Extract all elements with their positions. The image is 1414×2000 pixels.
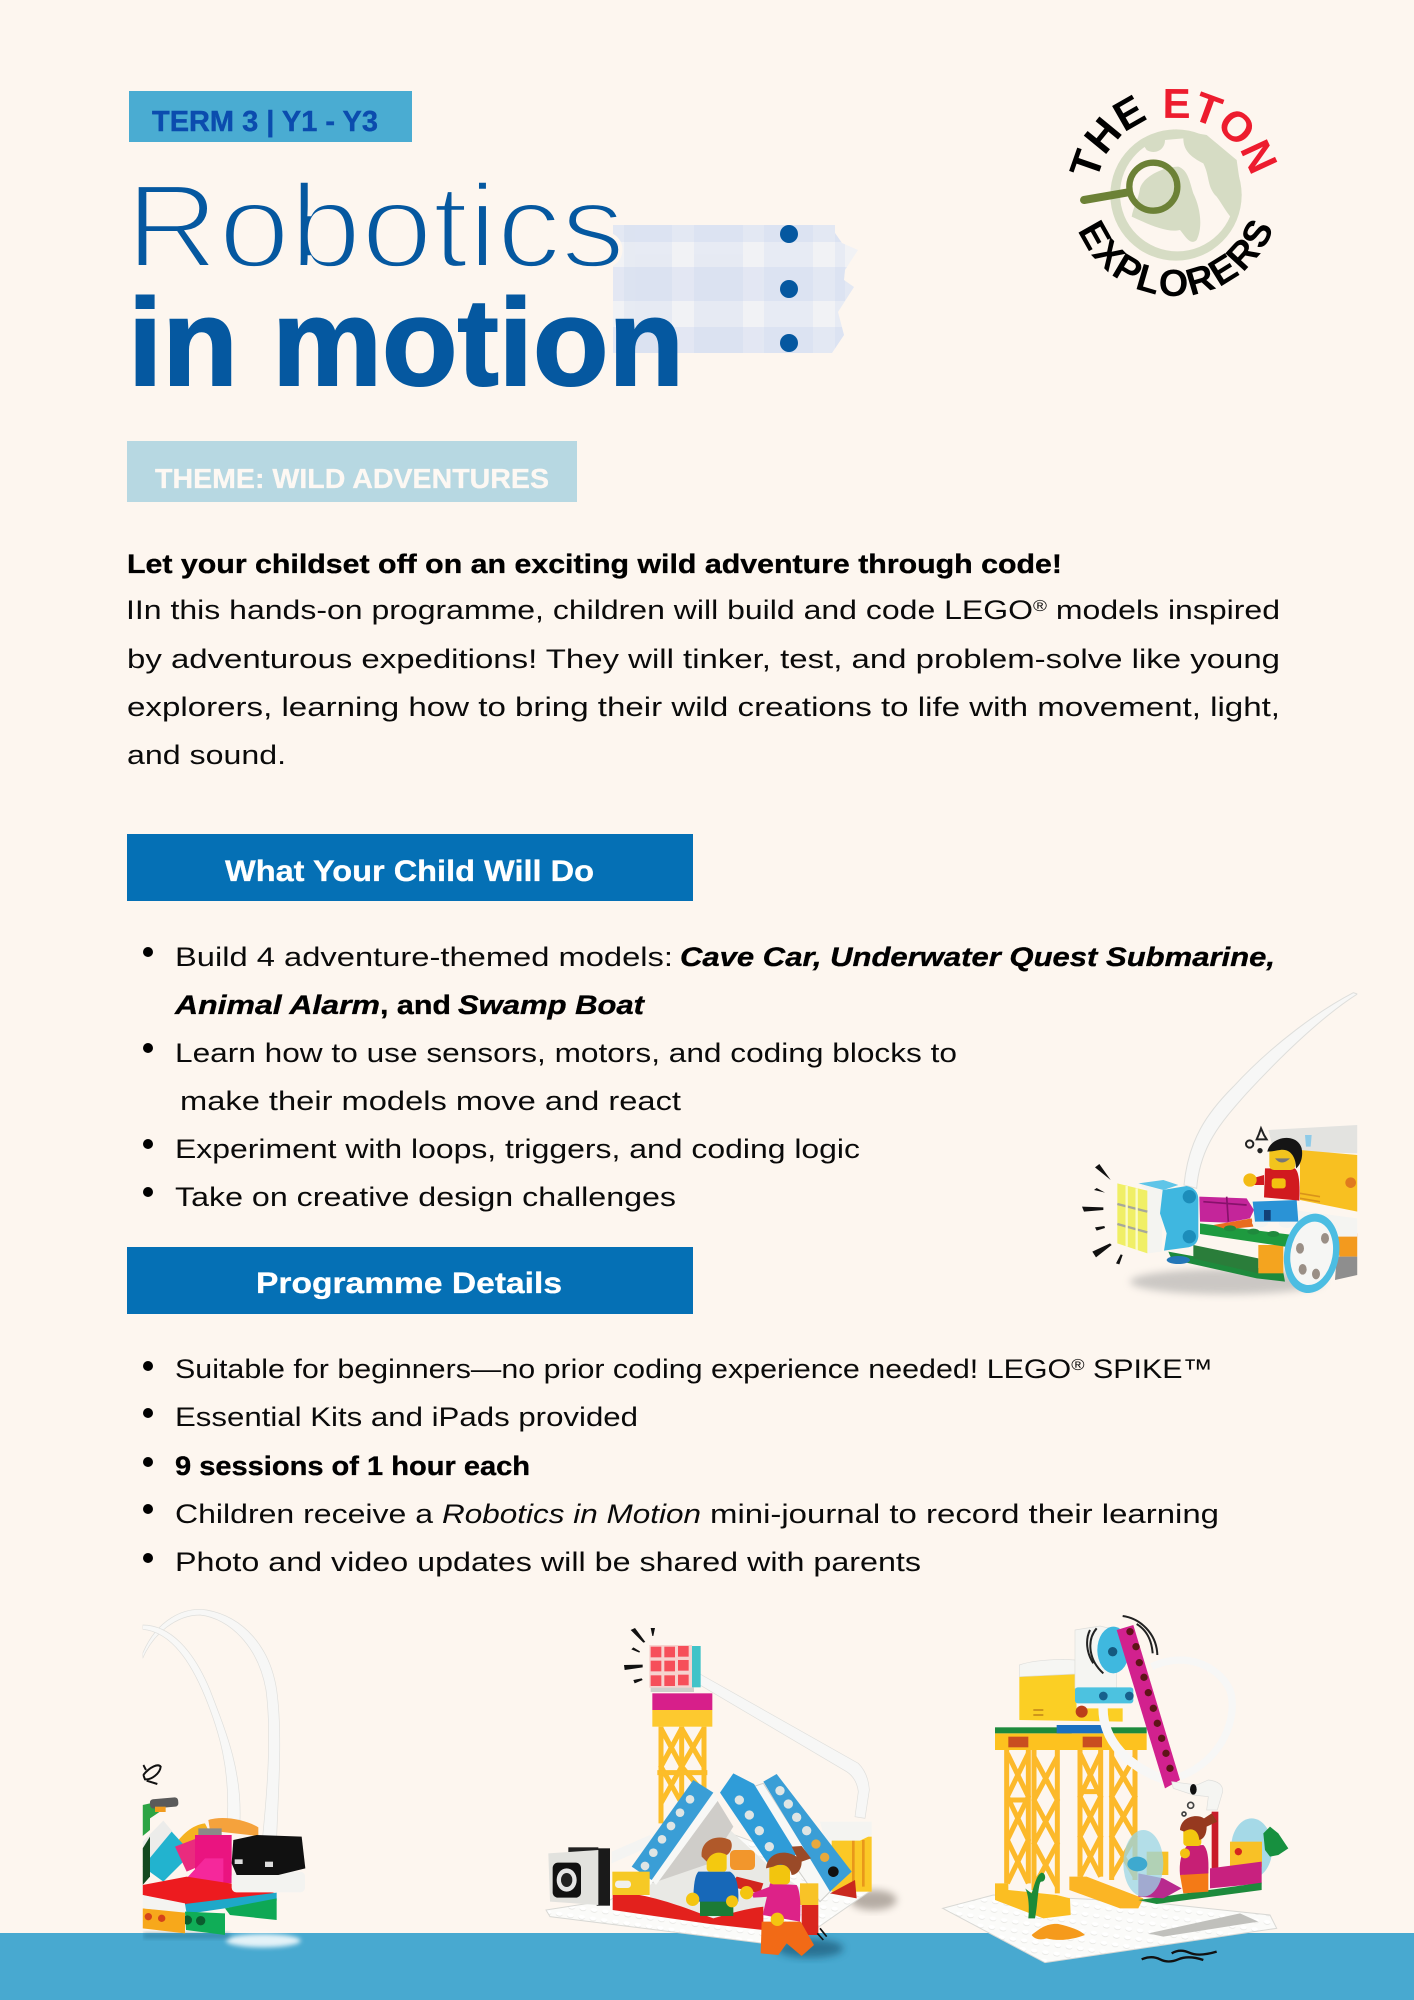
logo: The Eton Explorers [1069, 89, 1278, 296]
intro text block: and sound. [127, 740, 286, 770]
list: programme details: Robotics in Motion [442, 1499, 701, 1529]
list: programme details: Photo and video updates will be shared with parents [175, 1547, 921, 1577]
illustration: LEGO animal alarm (cropped at left) [143, 1610, 305, 1947]
list: programme details [143, 1354, 1219, 1577]
intro text block: Let your childset off on an exciting wild adventure through code! [127, 549, 1062, 579]
list: programme details: SPIKE™ [1085, 1354, 1213, 1384]
intro text block: IIn this hands-on programme, children will build and code LEGO [126, 595, 891, 625]
illustration: LEGO cave car [1082, 993, 1357, 1297]
term tag: TERM 3 | Y1 - Y3 [152, 106, 378, 138]
heading: What Your Child Will Do [127, 834, 693, 901]
intro text block: by adventurous expeditions! They will tinker, test, and problem-solve like young [127, 644, 1280, 674]
list: what your child will do: make their models move and react [180, 1086, 682, 1116]
intro text block: explorers, learning how to bring their wild creations to life with movement, light, [127, 692, 1280, 722]
list: programme details: Suitable for beginners—no prior coding experience needed! LEGO [175, 1354, 970, 1384]
intro text block: ® [1033, 598, 1047, 615]
list: what your child will do: Animal Alarm [174, 990, 380, 1020]
list: what your child will do: Learn how to use sensors, motors, and coding blocks to [175, 1038, 957, 1068]
list: programme details: Essential Kits and iPads provided [175, 1402, 638, 1432]
heading: Programme Details: Programme Details [256, 1267, 562, 1300]
list: what your child will do: Build 4 adventure-themed models: [175, 942, 673, 972]
list: what your child will do [143, 942, 1275, 1212]
illustration: LEGO submarine crane [943, 1616, 1288, 1963]
logo: The Eton Explorers: EXPLORERS [1078, 220, 1272, 296]
list: programme details: mini-journal to record their learning [710, 1499, 1219, 1529]
list: programme details: ® [1071, 1357, 1085, 1374]
title: Robotics [126, 160, 625, 293]
intro text block [126, 549, 1280, 770]
heading: What Your Child Will Do: What Your Child Will Do [225, 855, 594, 888]
term tag [129, 91, 412, 142]
intro text block: models inspired [1047, 595, 1280, 625]
title: in motion [128, 275, 684, 412]
decorative washi tape with dots [613, 225, 863, 353]
list: what your child will do: Cave Car, Underwater Quest Submarine, [680, 942, 1275, 972]
list: what your child will do: Experiment with loops, triggers, and coding logic [175, 1134, 860, 1164]
logo: The Eton Explorers: ETON [1165, 89, 1278, 174]
bottom blue band [0, 1933, 1414, 2000]
theme tag [127, 441, 577, 502]
logo: The Eton Explorers: THE [1069, 94, 1147, 172]
list: what your child will do: , and [380, 990, 451, 1020]
list: programme details: 9 sessions of 1 hour each [175, 1451, 530, 1481]
theme tag: THEME: WILD ADVENTURES [155, 463, 549, 494]
list: programme details: Children receive a [175, 1499, 434, 1529]
title [126, 160, 684, 412]
list: what your child will do: Swamp Boat [458, 990, 645, 1020]
list: what your child will do: Take on creative design challenges [175, 1182, 676, 1212]
heading: Programme Details [127, 1247, 693, 1314]
illustration: LEGO tent and tower [546, 1628, 897, 1958]
